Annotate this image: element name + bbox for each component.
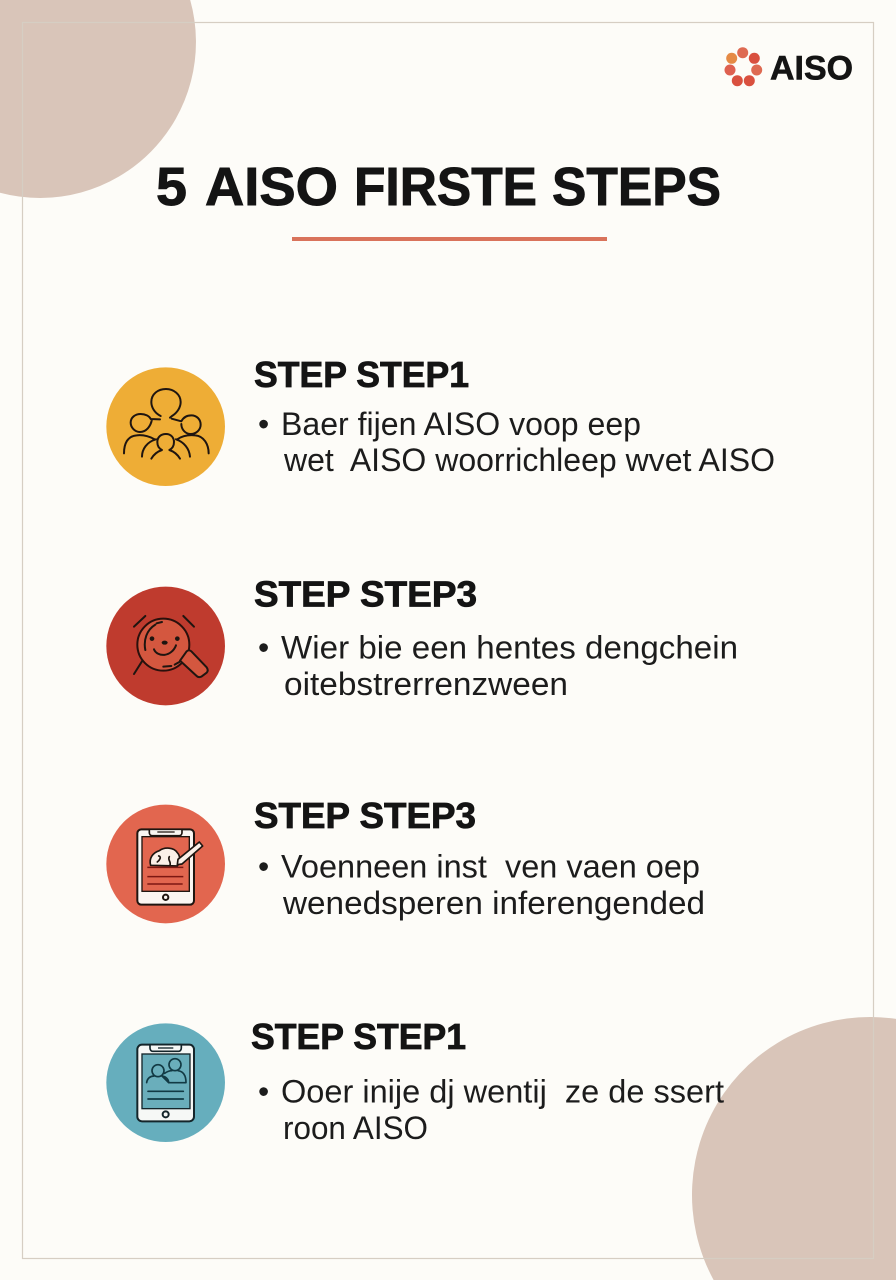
- step text: roon AISO: [283, 1110, 428, 1146]
- icon: people group on amber circle: [106, 367, 225, 486]
- title underline: [292, 237, 607, 241]
- step text: •: [258, 406, 269, 442]
- logo: AISO: [724, 47, 853, 88]
- step text: Baer fijen AISO voop eep: [281, 406, 641, 442]
- icon: magnifier with smile on red circle: [106, 587, 225, 705]
- step heading: STEP STEP3: [254, 574, 477, 614]
- step text: •: [258, 1074, 269, 1110]
- step text: [258, 1074, 724, 1146]
- step 2: [106, 574, 738, 705]
- step text: wet AISO woorrichleep wvet AISO: [283, 442, 775, 478]
- title: STEPS: [552, 157, 721, 217]
- step 3: [106, 795, 705, 923]
- title: 5: [156, 157, 187, 217]
- step text: •: [258, 848, 269, 884]
- icon: tablet with two people on teal circle: [106, 1023, 225, 1142]
- step text: Wier bie een hentes dengchein: [281, 630, 738, 666]
- step heading: STEP STEP1: [254, 354, 469, 395]
- step heading: STEP STEP3: [254, 795, 476, 836]
- step text: oitebstrerrenzween: [284, 666, 568, 702]
- title: [156, 157, 721, 217]
- step heading: STEP STEP1: [251, 1016, 466, 1057]
- icon: logo dots ring: [724, 47, 762, 86]
- step text: •: [258, 630, 269, 666]
- step text: wenedsperen inferengended: [282, 885, 705, 921]
- step 1: [106, 354, 775, 486]
- title: FIRSTE: [354, 157, 537, 217]
- decorative circle: bottom right: [692, 1017, 896, 1280]
- step text: Voenneen inst ven vaen oep: [281, 848, 700, 884]
- icon: tablet with brain and pencil on coral circle: [106, 805, 225, 923]
- decorative circle: top left: [0, 0, 196, 198]
- step text: [258, 630, 738, 702]
- title: AISO: [205, 157, 338, 217]
- step text: [258, 848, 705, 921]
- step 4: [106, 1016, 724, 1146]
- step text: Ooer inije dj wentij ze de ssert: [281, 1074, 724, 1110]
- logo wordmark: AISO: [770, 50, 853, 88]
- step text: [258, 406, 775, 478]
